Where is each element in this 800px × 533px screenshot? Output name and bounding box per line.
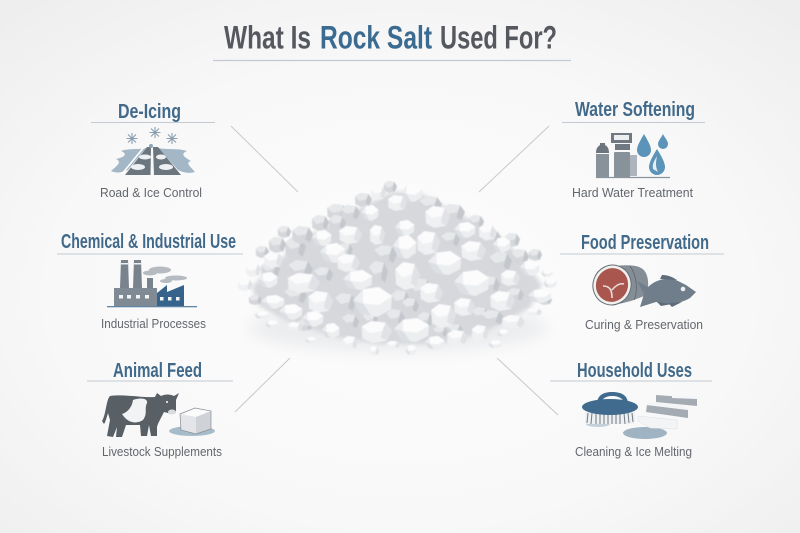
label: cleaning and ice melting: Cleaning & Ice Melting bbox=[575, 444, 692, 459]
icon: scrub brush and icy steps bbox=[582, 392, 697, 439]
label: industrial processes: Industrial Processes bbox=[101, 316, 206, 331]
heading: water softening: Water Softening bbox=[575, 99, 695, 121]
label: curing and preservation: Curing & Preservation bbox=[585, 317, 703, 332]
label: hard water treatment: Hard Water Treatment bbox=[572, 185, 693, 200]
connector lines bbox=[231, 126, 558, 415]
panel: chemical and industrial use bbox=[57, 231, 243, 331]
icon: factory bbox=[107, 260, 197, 307]
icon: icy road with snowflakes bbox=[111, 127, 195, 175]
title text: Used For? bbox=[440, 20, 557, 56]
label: livestock supplements: Livestock Supplements bbox=[102, 444, 222, 459]
icon: cured ham and fish bbox=[587, 260, 696, 310]
heading: chemical and industrial use: Chemical & Industrial Use bbox=[61, 231, 236, 253]
panel: food preservation bbox=[560, 232, 724, 332]
title text: Rock Salt bbox=[320, 20, 432, 56]
title bbox=[213, 20, 571, 60]
panel: animal feed bbox=[87, 360, 233, 459]
icon: cow with salt block bbox=[102, 393, 215, 437]
rock salt pile bbox=[238, 181, 557, 356]
heading: animal feed: Animal Feed bbox=[113, 360, 202, 382]
panel: household uses bbox=[550, 360, 712, 459]
panel: de-icing bbox=[91, 101, 215, 200]
panel: water softening bbox=[562, 99, 705, 200]
heading: food preservation: Food Preservation bbox=[581, 232, 709, 254]
icon: water softener and drops bbox=[596, 133, 670, 178]
heading: de-icing: De-Icing bbox=[118, 101, 181, 123]
heading: household uses: Household Uses bbox=[577, 360, 692, 382]
title text: What Is bbox=[224, 20, 311, 56]
label: road and ice control: Road & Ice Control bbox=[100, 185, 202, 200]
title text bbox=[224, 20, 557, 56]
